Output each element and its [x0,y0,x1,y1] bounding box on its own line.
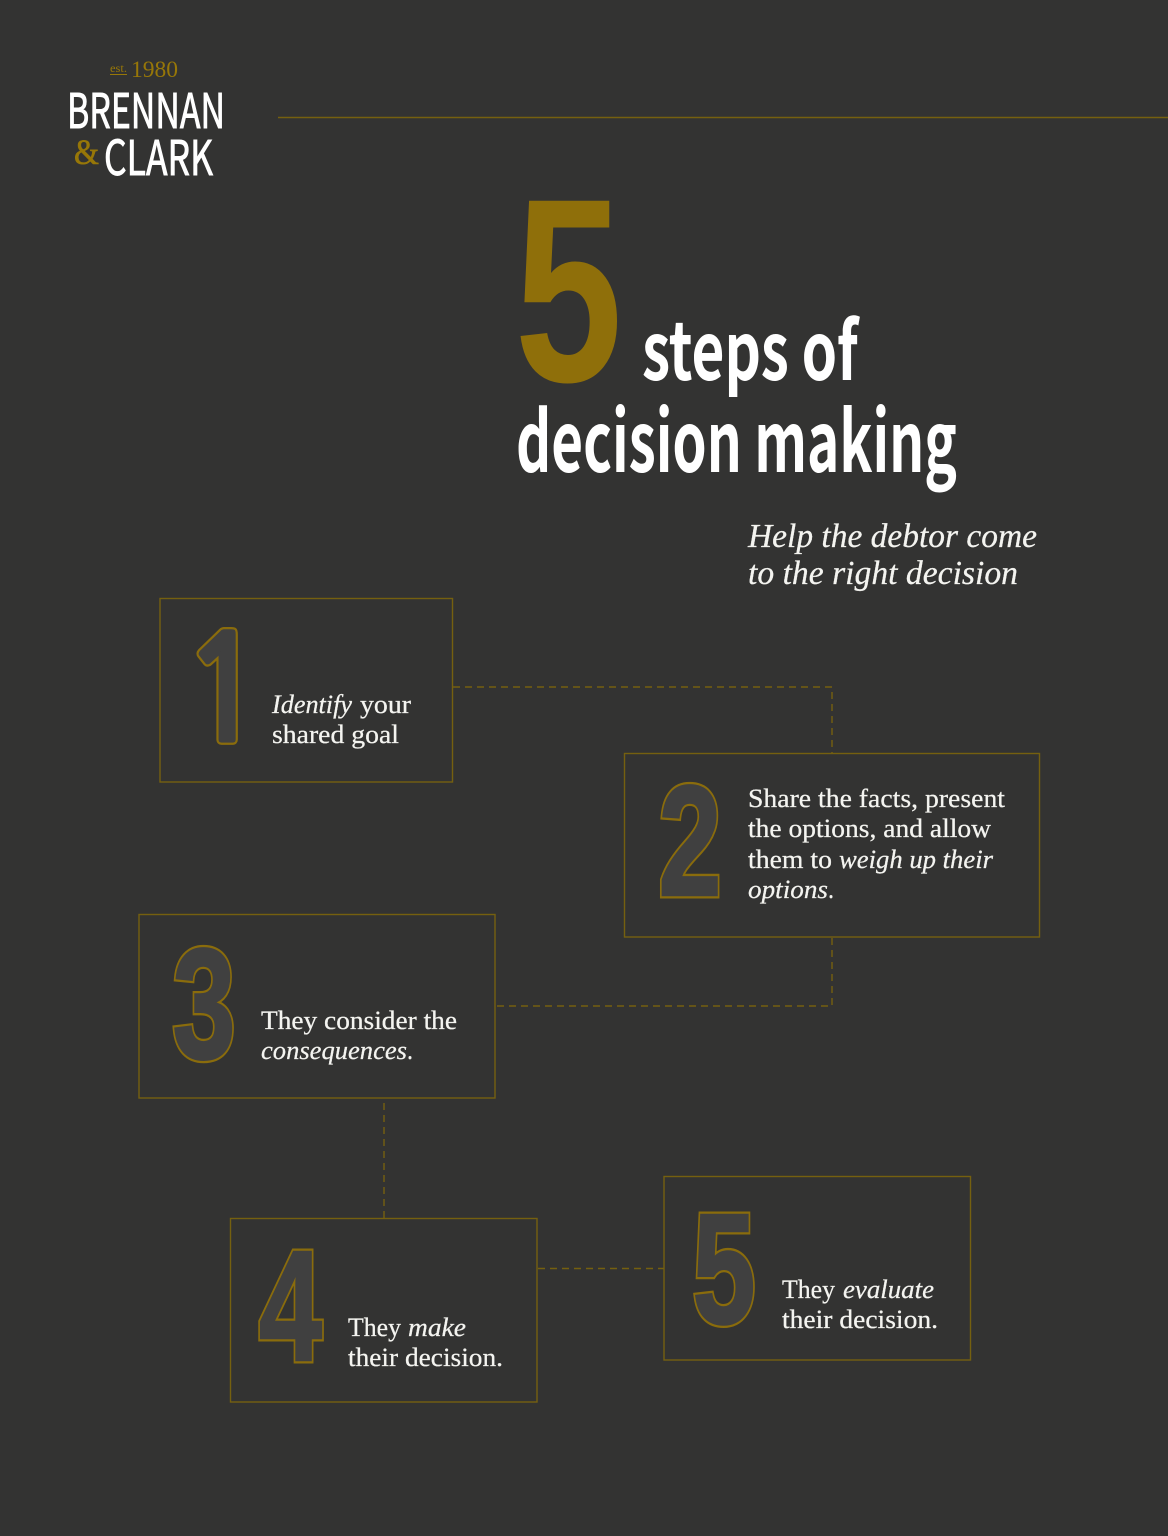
step 1 text [271,690,411,749]
numeral 5: 5 [693,1181,755,1356]
step 1 text: your [360,690,411,719]
numeral 2: 2 [659,753,721,928]
step 2 text: weigh up their [839,845,994,874]
numeral 4: 4 [259,1218,322,1393]
step 2 text [748,784,1006,904]
logo: 1980 [131,57,178,82]
connector: step 2 to step 3 [497,938,832,1006]
panel: step 4 [230,1218,537,1402]
step 5 text: their decision. [782,1305,938,1334]
numeral 1: 1 [182,619,266,764]
step 3 text: . [407,1036,413,1065]
logo [67,57,225,189]
connector: step 1 to step 2 [453,687,832,753]
numeral 5: 5 [693,1181,755,1356]
connector: step 3 to step 4 [383,1103,385,1219]
logo: BRENNAN [67,72,225,142]
header rule [278,116,1168,118]
numeral 3: 3 [173,916,235,1091]
numeral 3: 3 [173,916,235,1091]
step 3 text [261,1006,457,1065]
step 2 text: . [828,875,834,904]
panel: step 1 [160,598,452,782]
title line 1: steps of [642,288,860,404]
step 2 text: options [748,875,828,904]
step 2 text: Share the facts, present [748,784,1006,813]
numeral 2: 2 [659,753,721,928]
subtitle: to the right decision [748,555,1018,592]
logo: est. [110,61,127,75]
subtitle [747,518,1037,592]
step 3 text: They consider the [261,1006,457,1035]
panel: step 2 [624,753,1040,937]
connector: step 4 to step 5 [538,1268,664,1270]
numeral 1: 1 [182,619,266,764]
numeral 4: 4 [259,1218,322,1393]
step 5 text [782,1275,938,1334]
step 4 text: their decision. [348,1343,503,1372]
step 5 text: evaluate [843,1275,934,1304]
large numeral 5: 5 [515,143,622,437]
logo: & [74,132,99,172]
step 2 text: them to [748,845,832,874]
step 1 text: Identify [271,690,352,719]
step 1 text: shared goal [272,720,399,749]
step 4 text: They [348,1313,401,1342]
step 4 text [348,1313,503,1372]
panel: step 3 [139,914,495,1098]
subtitle: Help the debtor come [747,518,1037,555]
step 4 text: make [408,1313,466,1342]
panel: step 5 [664,1176,970,1360]
step 5 text: They [782,1275,835,1304]
step 3 text: consequences [261,1036,407,1065]
logo: CLARK [104,119,213,189]
step 2 text: the options, and allow [748,814,991,843]
title [515,143,957,497]
